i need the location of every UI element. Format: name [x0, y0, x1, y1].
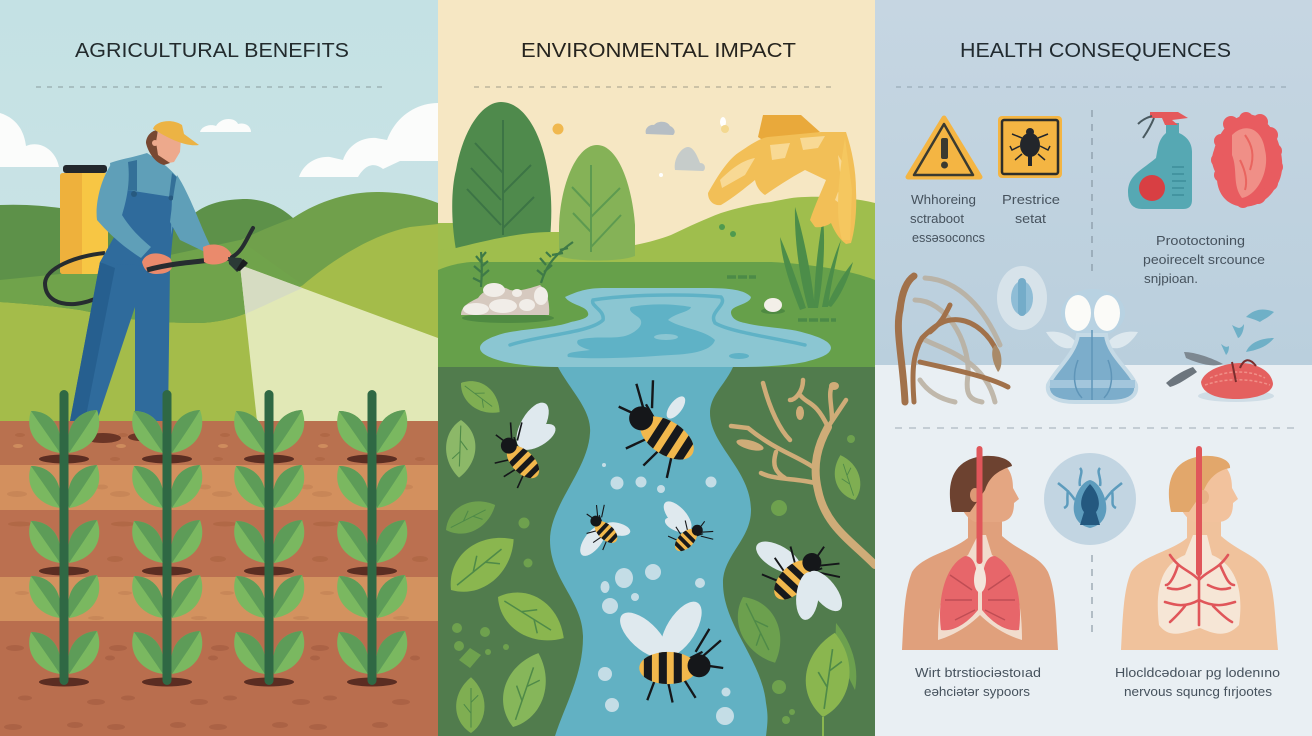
bee bottom	[620, 602, 724, 703]
icon: warning triangle	[908, 118, 980, 177]
text: right lung caption: nervous squncg fırjootes	[1124, 685, 1272, 699]
figure: human with affected airways	[1121, 446, 1278, 650]
text: warning caption: sctraboot	[910, 212, 965, 226]
icon: organ and scalpel	[1166, 309, 1274, 402]
text: protection caption: snjpioan.	[1144, 271, 1198, 286]
branching tree	[731, 380, 875, 565]
yellow chemical splash	[708, 115, 856, 244]
heading: environmental impact: ENVIRONMENTAL IMPACT	[521, 39, 797, 62]
text: protection caption: Prootoctoning	[1156, 233, 1245, 248]
text: left lung caption	[915, 666, 1041, 699]
icon: rocks	[461, 283, 785, 323]
left arm	[97, 162, 151, 258]
bee small left	[580, 504, 630, 556]
back hills	[0, 192, 438, 425]
text: insect caption: setat	[1015, 212, 1047, 226]
icon: sprigs	[473, 242, 573, 287]
figure: human with damaged lungs	[902, 446, 1058, 650]
icon: backpack tank	[60, 165, 108, 274]
text: warning caption: Whhoreing	[911, 193, 976, 207]
bees	[479, 372, 848, 702]
icon: insect warning sign	[998, 116, 1062, 178]
icon: clouds left panel	[0, 103, 438, 177]
text: protection caption	[1143, 233, 1265, 286]
text: right lung caption: Hlocldcədoıar pg lodenıno	[1115, 666, 1280, 680]
text: insect caption	[1002, 193, 1060, 226]
bee small right	[664, 501, 714, 552]
figure: farmer with sprayer	[45, 121, 253, 421]
heading: health consequences: HEALTH CONSEQUENCES	[960, 39, 1231, 62]
bee right	[756, 542, 842, 620]
bee top centre	[618, 380, 694, 478]
panel: environmental impact	[438, 0, 875, 736]
icon: translucent insect specimen	[1046, 289, 1138, 402]
icon: withered tree	[898, 276, 1008, 402]
tree: light green	[559, 145, 635, 260]
spray mist	[240, 266, 438, 421]
light hill	[438, 196, 875, 280]
icon: damaged organ	[1211, 112, 1283, 208]
panel: health consequences	[875, 0, 1312, 736]
text: right lung caption	[1115, 666, 1280, 699]
soil strips	[0, 421, 438, 736]
text: protection caption: peoirecelt srcounce	[1143, 252, 1265, 267]
back hill	[438, 223, 456, 250]
head and cap	[146, 121, 199, 165]
text: left lung caption: Wirt btrstiociəstoıad	[915, 666, 1041, 680]
panel: agricultural benefits	[0, 0, 440, 736]
tree: dark green	[452, 102, 551, 250]
icon: small specimen oval	[997, 266, 1047, 330]
text: warning caption: essəsoconcs	[912, 231, 985, 245]
text: warning caption	[910, 193, 985, 245]
text: insect caption: Prestrice	[1002, 193, 1060, 207]
heading: agricultural benefits: AGRICULTURAL BENEFITS	[75, 39, 349, 62]
small clouds and dots	[552, 117, 836, 320]
mid ground	[438, 262, 875, 370]
right arm	[170, 175, 210, 252]
lower ground and river	[438, 367, 875, 736]
pond	[480, 288, 831, 367]
bubbles	[598, 463, 734, 725]
icon: spray bottle	[1128, 112, 1192, 209]
icon: insect in circle	[1044, 453, 1136, 545]
leaves lower section	[438, 373, 866, 736]
grass tuft	[780, 207, 853, 310]
plant rows	[29, 390, 407, 686]
text: left lung caption: eəhciətər sypoors	[924, 685, 1030, 699]
bee top left	[494, 402, 556, 488]
